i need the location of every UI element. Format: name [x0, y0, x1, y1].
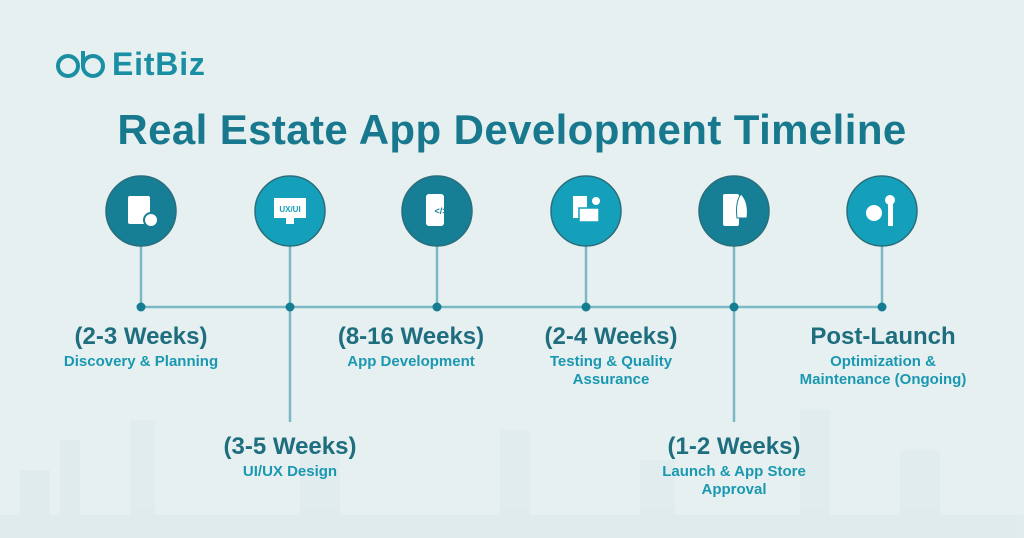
step 3 — [338, 323, 484, 370]
step 5: Approval — [701, 481, 766, 498]
step 1 — [64, 323, 218, 370]
step 2 — [224, 433, 356, 480]
title: Real Estate App Development Timeline — [117, 106, 907, 153]
step 4: (2-4 Weeks) — [545, 323, 677, 350]
step 6: Optimization & — [830, 353, 936, 370]
icon: checklist — [106, 176, 176, 246]
background skyline — [0, 390, 1024, 538]
icon circles — [105, 175, 918, 247]
icon: ux/ui monitor: UX/UI — [279, 205, 301, 214]
icon: rocket — [699, 176, 769, 246]
logo — [56, 46, 206, 82]
step 4: Assurance — [573, 371, 649, 388]
step 3: (8-16 Weeks) — [338, 323, 484, 350]
step 1: Discovery & Planning — [64, 353, 218, 370]
step 3: App Development — [347, 353, 475, 370]
icon: phone code: </> — [434, 206, 448, 216]
step 4 — [545, 323, 677, 388]
icon: testing — [551, 176, 621, 246]
step 4: Testing & Quality — [550, 353, 672, 370]
step 1: (2-3 Weeks) — [75, 323, 207, 350]
icon: phone code — [402, 176, 472, 246]
step 6: Maintenance (Ongoing) — [800, 371, 966, 388]
step 2: (3-5 Weeks) — [224, 433, 356, 460]
step 6 — [800, 323, 966, 388]
step 5 — [662, 433, 806, 498]
step 2: UI/UX Design — [243, 463, 337, 480]
icon: gear wrench — [847, 176, 917, 246]
step 6: Post-Launch — [810, 323, 956, 350]
step 5: Launch & App Store — [662, 463, 806, 480]
icon: ux/ui monitor — [255, 176, 325, 246]
logo: EitBiz — [112, 46, 206, 82]
step 5: (1-2 Weeks) — [668, 433, 800, 460]
